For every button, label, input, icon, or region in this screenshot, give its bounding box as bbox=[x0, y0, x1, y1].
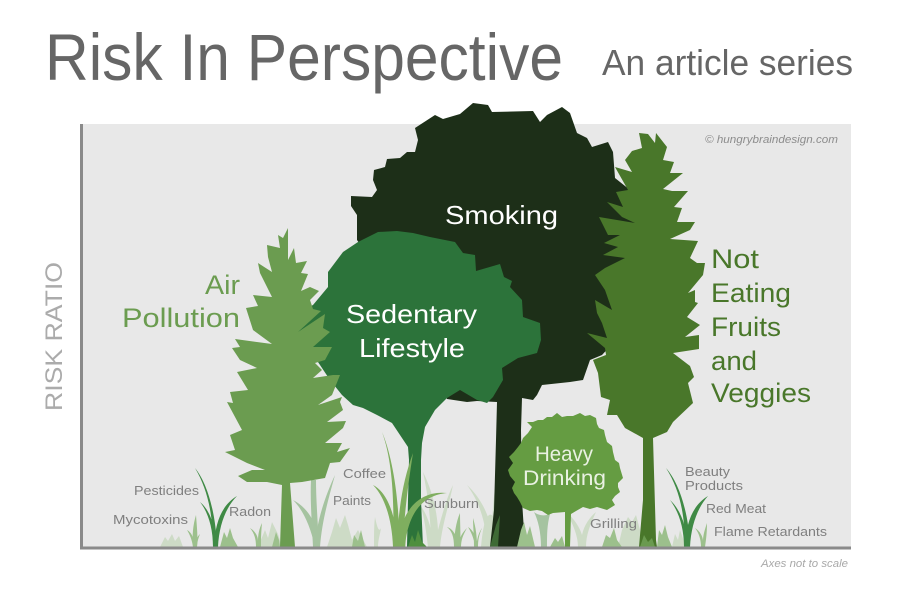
axes bbox=[82, 124, 851, 548]
label: sedentary lifestyle: Lifestyle bbox=[359, 333, 465, 363]
label: not eating fruits and veggies: and bbox=[711, 346, 757, 376]
small risk labels: Radon bbox=[229, 504, 271, 519]
label: air pollution: Pollution bbox=[122, 303, 240, 333]
foreground grass: green blades bbox=[220, 432, 672, 547]
small risk labels: Pesticides bbox=[134, 483, 200, 498]
subtitle: An article series bbox=[602, 42, 853, 83]
label: not eating fruits and veggies: Eating bbox=[711, 278, 791, 308]
small risk labels: Red Meat bbox=[706, 501, 766, 516]
label: not eating fruits and veggies: Not bbox=[711, 244, 760, 274]
small risk labels: Mycotoxins bbox=[113, 512, 189, 527]
panel: chart background bbox=[82, 124, 851, 547]
small risk labels: Grilling bbox=[590, 516, 637, 531]
label: heavy drinking: Heavy bbox=[535, 443, 593, 466]
tree: not eating fruits and veggies bbox=[587, 133, 705, 547]
label: not eating fruits and veggies: Veggies bbox=[711, 378, 811, 408]
background grass: mid-green tufts bbox=[187, 475, 550, 547]
foreground grass: dark blades left bbox=[195, 468, 237, 547]
axes note: Axes not to scale bbox=[760, 558, 848, 570]
label: heavy drinking bbox=[523, 443, 606, 490]
label: air pollution bbox=[122, 270, 240, 333]
tree: smoking bbox=[351, 103, 636, 547]
label: not eating fruits and veggies: Fruits bbox=[711, 312, 781, 342]
small risk labels: Products bbox=[685, 478, 744, 493]
background grass: pale tufts bbox=[160, 472, 686, 547]
label: not eating fruits and veggies bbox=[711, 244, 811, 408]
label: smoking: Smoking bbox=[445, 200, 558, 230]
foreground grass: dark blades right bbox=[666, 468, 708, 547]
tree: air pollution bbox=[225, 228, 350, 547]
copyright note: © hungrybraindesign.com bbox=[705, 134, 838, 146]
tree: sedentary lifestyle bbox=[297, 231, 541, 547]
small risk labels: Flame Retardants bbox=[714, 524, 828, 539]
small risk labels: Sunburn bbox=[424, 496, 479, 511]
label: sedentary lifestyle bbox=[346, 299, 477, 363]
label: heavy drinking: Drinking bbox=[523, 467, 606, 490]
label: air pollution: Air bbox=[205, 270, 240, 300]
small risk labels: Coffee bbox=[343, 466, 386, 481]
small risk labels: Beauty bbox=[685, 464, 731, 479]
y axis label: RISK RATIO bbox=[41, 262, 68, 411]
small risk labels bbox=[113, 464, 828, 539]
tree: heavy drinking bbox=[508, 413, 623, 547]
title: Risk In Perspective bbox=[45, 20, 563, 94]
small risk labels: Paints bbox=[333, 493, 372, 508]
label: sedentary lifestyle: Sedentary bbox=[346, 299, 477, 329]
